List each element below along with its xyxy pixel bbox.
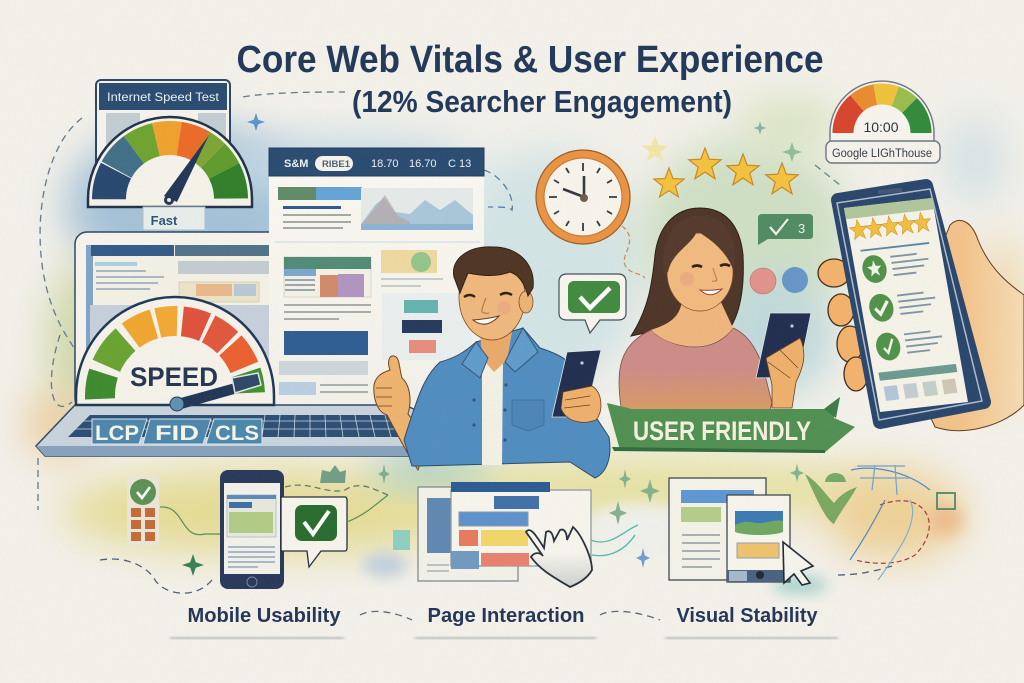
bottom row <box>279 382 368 395</box>
gauge dome <box>830 81 934 150</box>
card header <box>99 83 227 110</box>
icon: thumbs-up hand <box>374 356 428 470</box>
phone <box>756 313 811 378</box>
icon: pale star <box>642 136 668 161</box>
eyes, nose and smile <box>680 264 730 295</box>
callout: green check tag <box>758 214 813 245</box>
panel: laptop base with keyboard <box>36 405 480 456</box>
icon: green check swoosh <box>805 474 857 524</box>
callout: check bubble <box>559 274 626 333</box>
large blue panel <box>284 331 368 355</box>
label: page interaction: Page Interaction <box>428 605 584 627</box>
area chart <box>361 188 473 230</box>
teal-green blob <box>320 465 346 483</box>
check row two <box>874 327 945 362</box>
gauge label: SPEED <box>130 362 218 392</box>
screen <box>844 198 968 412</box>
neck <box>651 300 733 346</box>
label: mobile usability: Mobile Usability <box>188 605 341 627</box>
dashed connector lines <box>38 92 895 620</box>
check row <box>867 288 938 323</box>
teal dashed arrow <box>591 525 638 556</box>
grey row <box>279 361 368 375</box>
header text <box>284 156 471 171</box>
back page <box>418 487 518 581</box>
metric labels: LCP FID CLS: LCP <box>95 422 139 445</box>
fingers <box>818 259 868 391</box>
gauge dome <box>88 117 252 207</box>
gauge arcs <box>843 94 921 172</box>
checklist widget <box>127 476 159 546</box>
gauge value: 10:00 <box>863 119 899 135</box>
rating stars <box>654 148 798 197</box>
panel: hand holding phone <box>818 220 1024 431</box>
phone body <box>838 186 984 422</box>
panel: laptop <box>75 232 405 410</box>
right column tan card <box>381 250 443 287</box>
hair back <box>631 208 743 336</box>
label text: Google LIGhThouse <box>832 148 932 160</box>
arrow cursor <box>783 542 813 585</box>
icon: dotted line from clock <box>622 226 645 278</box>
watercolor wash background <box>25 97 1024 594</box>
panel: page interaction <box>418 482 638 587</box>
label: visual stability: Visual Stability <box>676 605 818 627</box>
header text: S&M <box>284 158 308 170</box>
hand cursor <box>526 527 592 587</box>
icon: green umbrella leaf <box>825 473 846 482</box>
hair front <box>663 216 735 275</box>
collar <box>462 328 538 378</box>
window body <box>269 148 484 406</box>
gauge needle <box>164 135 209 205</box>
top banner bars <box>278 187 362 229</box>
sparkle <box>182 554 204 576</box>
ear <box>519 291 533 313</box>
card <box>96 80 230 205</box>
shirt <box>404 328 610 478</box>
subtitle: (12% Searcher Engagement) <box>352 84 732 119</box>
label box <box>826 141 940 163</box>
decorative line diagram <box>850 465 930 580</box>
label underlines <box>170 637 838 639</box>
undershirt <box>482 362 503 465</box>
laptop lid <box>75 232 405 410</box>
person: man with phone <box>404 247 610 478</box>
green connector <box>160 507 220 535</box>
icon: wall clock <box>536 150 630 244</box>
header text: RIBE1 <box>322 159 351 170</box>
decorative leaf sparkles <box>609 464 804 568</box>
panel: Google Lighthouse badge <box>826 81 940 172</box>
check callout <box>281 497 347 567</box>
hand <box>766 338 804 408</box>
gauge dome <box>76 297 274 405</box>
pocket <box>512 400 544 431</box>
shirt buttons <box>472 383 508 442</box>
notch <box>878 188 902 194</box>
title: Core Web Vitals & User Experience <box>236 39 824 81</box>
five stars <box>848 211 932 240</box>
panel: large speed gauge <box>76 297 274 471</box>
front page <box>727 495 790 582</box>
heading rule <box>860 242 929 252</box>
decorative sparkle: green <box>782 142 802 162</box>
fast tag <box>143 207 205 230</box>
front page <box>451 482 591 569</box>
palm <box>900 220 1024 431</box>
gauge needle <box>170 373 261 411</box>
bottom bar <box>878 364 957 381</box>
neck <box>480 332 512 372</box>
callout: green check tag: 3 <box>798 221 805 236</box>
base <box>36 405 480 456</box>
banner: user friendly: USER FRIENDLY <box>633 416 811 446</box>
decorative sparkle: blue <box>247 113 265 131</box>
card title: Internet Speed Test <box>107 92 220 104</box>
window header bar <box>269 148 484 176</box>
gauge segments <box>100 321 250 471</box>
screen content <box>844 198 968 412</box>
phone <box>220 470 284 589</box>
panel: internet speed test card <box>88 80 252 260</box>
sparkle top <box>378 464 390 484</box>
panel: large phone <box>837 186 984 422</box>
green arrow <box>347 495 388 522</box>
divider strip <box>275 241 480 243</box>
face <box>459 254 525 340</box>
decorative sparkle: small green <box>754 122 766 134</box>
right column buttons <box>382 293 472 360</box>
gauge segments <box>109 138 231 260</box>
header text: 18.70 <box>371 158 399 170</box>
screen top bar <box>844 198 934 219</box>
panel: mobile usability <box>127 464 390 589</box>
sweater <box>619 328 772 410</box>
phone <box>552 350 601 417</box>
banner: user friendly <box>607 397 855 453</box>
keyboard <box>68 415 425 437</box>
panel: browser window <box>269 148 484 406</box>
header text: 16.70 <box>409 158 437 170</box>
dashed arrow <box>285 485 388 495</box>
fast tag: Fast <box>151 213 178 228</box>
header text: C 13 <box>448 158 471 170</box>
hand on phone <box>561 386 601 422</box>
metric labels: LCP FID CLS: FID <box>155 422 199 445</box>
eyes, nose and smile <box>464 293 512 324</box>
icon: small square outline <box>937 493 955 509</box>
laptop screen <box>86 245 276 405</box>
face <box>667 233 733 311</box>
hair <box>453 247 533 296</box>
back page <box>669 478 766 580</box>
metric labels: LCP FID CLS <box>92 419 262 445</box>
content card with image <box>284 257 371 297</box>
decorative dots <box>750 267 808 294</box>
bottom tiles <box>884 379 957 401</box>
person: woman with phone <box>619 208 811 410</box>
panel: visual stability <box>669 478 813 585</box>
metric labels: LCP FID CLS: CLS <box>215 422 259 445</box>
text lines <box>284 304 371 320</box>
star row <box>860 249 932 284</box>
